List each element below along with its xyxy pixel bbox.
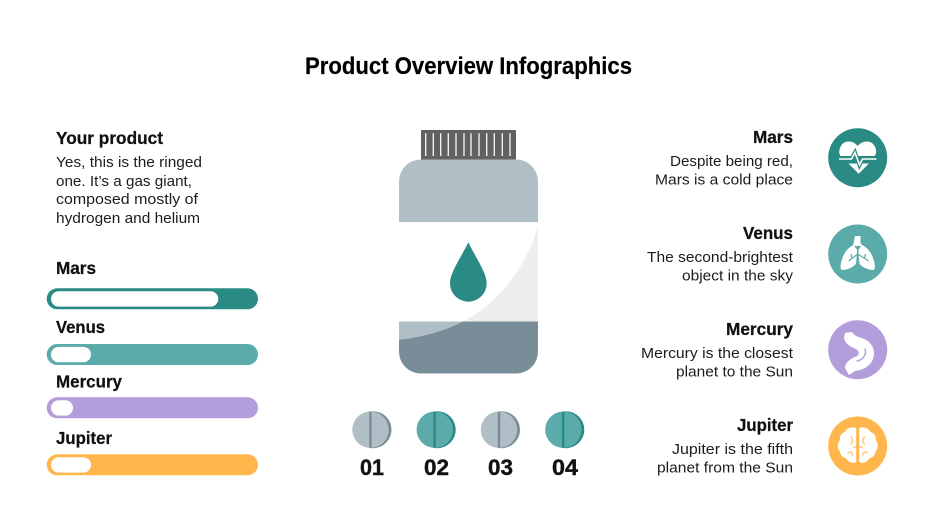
text block: Venus: The second-brightest xyxy=(647,249,794,266)
heading: Mercury: Mercury xyxy=(726,319,793,339)
bar label: Mars: Mars xyxy=(56,258,96,278)
panel: Venus xyxy=(647,223,887,284)
text block: your product description: Yes, this is the ringed xyxy=(56,154,202,171)
number 01: 01 xyxy=(360,455,384,480)
icon: brain xyxy=(828,416,887,476)
progress bar: Mercury xyxy=(47,397,258,418)
title: Product Overview Infographics xyxy=(305,53,632,80)
text block: your product description: one. It’s a gas giant, xyxy=(56,173,192,190)
bar label: Mercury: Mercury xyxy=(56,372,122,392)
text block: Mercury: planet to the Sun xyxy=(676,364,793,380)
icon: lungs xyxy=(828,224,887,284)
text block: Venus xyxy=(647,249,794,284)
panel: Mars xyxy=(655,127,887,188)
icon: stomach xyxy=(828,320,887,379)
text block: Jupiter: planet from the Sun xyxy=(657,460,793,476)
pill 04 xyxy=(545,411,584,448)
bottle cap xyxy=(421,130,516,161)
pill 02 xyxy=(417,411,456,448)
bottle body xyxy=(399,160,538,374)
text block: Mars: Despite being red, xyxy=(670,153,793,170)
text block: Jupiter: Jupiter is the fifth xyxy=(672,441,793,458)
text block: Mars xyxy=(655,153,793,188)
panel: progress bars xyxy=(47,258,258,475)
progress bar: Jupiter xyxy=(47,454,258,475)
progress bar: Mars xyxy=(47,288,258,309)
bar label: Venus: Venus xyxy=(56,317,105,337)
text block: Venus: object in the sky xyxy=(682,268,794,284)
icon: heart with pulse xyxy=(828,128,887,187)
text block: Mars: Mars is a cold place xyxy=(655,172,793,188)
panel: Mercury xyxy=(641,319,887,380)
panel: Jupiter xyxy=(657,415,887,476)
panel: pills xyxy=(352,411,584,480)
heading: Venus: Venus xyxy=(743,223,793,243)
number 03: 03 xyxy=(488,455,513,480)
text block: Mercury xyxy=(641,345,794,380)
pill 03 xyxy=(481,411,520,448)
text block: your product description: composed mostly of xyxy=(56,191,199,208)
panel: your product xyxy=(56,128,202,227)
number 04: 04 xyxy=(552,455,579,480)
bar label: Jupiter: Jupiter xyxy=(56,428,112,448)
heading: Mars: Mars xyxy=(753,127,793,147)
text block: Mercury: Mercury is the closest xyxy=(641,345,794,362)
text block: your product description xyxy=(56,154,202,227)
text block: Jupiter xyxy=(657,441,793,476)
progress bar: Venus xyxy=(47,344,258,365)
number 02: 02 xyxy=(424,455,449,480)
heading: Jupiter: Jupiter xyxy=(737,415,793,435)
pill 01 xyxy=(352,411,392,448)
text block: your product description: hydrogen and helium xyxy=(56,210,200,227)
heading: your product: Your product xyxy=(56,128,163,148)
icon: water drop xyxy=(450,242,487,302)
bottle illustration xyxy=(399,130,538,374)
